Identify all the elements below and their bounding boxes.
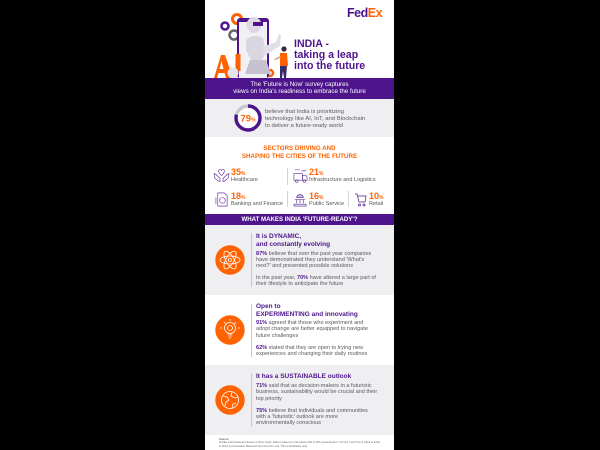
text block <box>256 344 368 357</box>
title <box>294 38 365 72</box>
heading: and constantly evolving <box>256 241 330 248</box>
source note: Source: <box>219 438 229 440</box>
text block: top priority <box>256 396 282 402</box>
icon: healthcare <box>214 169 230 182</box>
banner: what makes India future-ready: WHAT MAKES INDIA 'FUTURE-READY'? <box>242 216 357 223</box>
donut chart: 79%: 79% <box>240 113 256 124</box>
banner: survey intro: views on India's readiness to embrace the future <box>233 88 366 95</box>
divider <box>250 373 252 427</box>
divider <box>286 191 289 207</box>
label: Healthcare <box>231 177 258 183</box>
title: into the future <box>294 60 365 72</box>
divider <box>286 168 289 185</box>
text block: business, sustainability would be crucial and their <box>256 389 377 395</box>
text block <box>256 383 378 402</box>
text block: with a 'futuristic' outlook are more <box>256 414 338 420</box>
icon: phone with robot <box>237 17 281 78</box>
icon: infrastructure <box>294 170 308 183</box>
label: Public Service <box>309 201 344 207</box>
sector: healthcare <box>214 167 258 183</box>
divider <box>250 304 252 357</box>
panel: experimenting <box>205 295 394 365</box>
title: INDIA - <box>294 38 329 50</box>
text: 79% description: to deliver a future-ready world <box>265 123 343 129</box>
text block: have demonstrated they understand 'What's <box>256 257 364 263</box>
banner: survey intro <box>205 78 394 99</box>
value: 16%: 16% <box>309 191 323 201</box>
sector: retail <box>355 191 384 207</box>
icon: globe <box>215 385 245 415</box>
text block: 87% believe that over the past year companies <box>256 250 371 256</box>
label: Banking and Finance <box>231 201 283 207</box>
text block <box>256 274 376 287</box>
sector: public service <box>294 191 344 207</box>
heading: It has a SUSTAINABLE outlook <box>256 373 351 380</box>
text block: their lifestyle to anticipate the future <box>256 281 343 287</box>
banner: survey intro: The 'Future is Now' survey captures <box>250 81 349 88</box>
text block <box>256 320 368 339</box>
value: 10%: 10% <box>369 191 383 201</box>
sector: infrastructure <box>294 167 376 183</box>
text block: environmentally conscious <box>256 420 321 426</box>
icon: banking <box>216 192 228 206</box>
title: taking a leap <box>294 48 358 60</box>
text block: future challenges <box>256 333 298 339</box>
value: 35%: 35% <box>231 167 245 177</box>
text block: 62% stated that they are open to trying new <box>256 344 363 350</box>
header illustration <box>214 13 288 78</box>
icon: atom <box>215 245 245 275</box>
text block: experiences and changing their daily routines <box>256 351 367 357</box>
text: 79% description <box>265 109 365 129</box>
divider <box>347 191 350 207</box>
sector: banking <box>216 191 283 207</box>
text block: 91% agreed that those who experiment and <box>256 320 363 326</box>
heading: sectors: SHAPING THE CITIES OF THE FUTURE <box>242 153 357 160</box>
banner: what makes India future-ready <box>205 214 394 225</box>
label: Retail <box>369 201 383 207</box>
source note: FedEx-commissioned 'Future is Now' study. Data is based on interviews with 4,215 respondents in 10 Tier 1 and Tier 2 cities in India, <box>219 441 380 444</box>
text block: next?' and presented possible solutions <box>256 263 353 269</box>
panel: 79% stat <box>205 99 394 137</box>
heading: sectors <box>242 144 357 160</box>
panel: sustainable <box>205 365 394 435</box>
text block <box>256 408 368 426</box>
value: 21%: 21% <box>309 167 323 177</box>
value: 18%: 18% <box>231 191 245 201</box>
text block: 75% believe that individuals and communities <box>256 408 368 414</box>
heading <box>256 233 330 248</box>
heading: Open to <box>256 303 281 310</box>
heading: It is DYNAMIC, <box>256 233 301 240</box>
donut chart: 79% <box>234 104 262 132</box>
logo: FedEx: FedEx. <box>347 6 383 20</box>
heading: EXPERIMENTING and innovating <box>256 311 358 318</box>
icon: cart <box>355 194 366 206</box>
heading <box>256 303 358 318</box>
icon: light bulb <box>215 315 245 345</box>
panel: infographic page <box>205 0 394 450</box>
text block <box>256 250 372 269</box>
source note <box>219 438 380 448</box>
text block: In the past year, 70% have altered a large part of <box>256 274 376 280</box>
text block: 71% said that as decision-makers in a futuristic <box>256 383 372 389</box>
source note: in 2021 by Innovative Research Services Pvt. Ltd. This is illustrative only. <box>219 445 308 448</box>
text: 79% description: technology like AI, IoT, and Blockchain <box>265 116 365 122</box>
label: Infrastructure and Logistics <box>309 177 376 183</box>
text block: adopt change are better equipped to navigate <box>256 326 368 332</box>
icon: AI letters <box>214 54 240 78</box>
heading: sectors: SECTORS DRIVING AND <box>263 144 336 152</box>
icon: public service <box>294 194 306 206</box>
text: 79% description: believe that India is prioritizing <box>265 109 344 115</box>
panel: dynamic <box>205 225 394 295</box>
icon: gears <box>222 14 273 76</box>
divider <box>250 233 252 287</box>
icon: woman figure <box>274 46 288 78</box>
